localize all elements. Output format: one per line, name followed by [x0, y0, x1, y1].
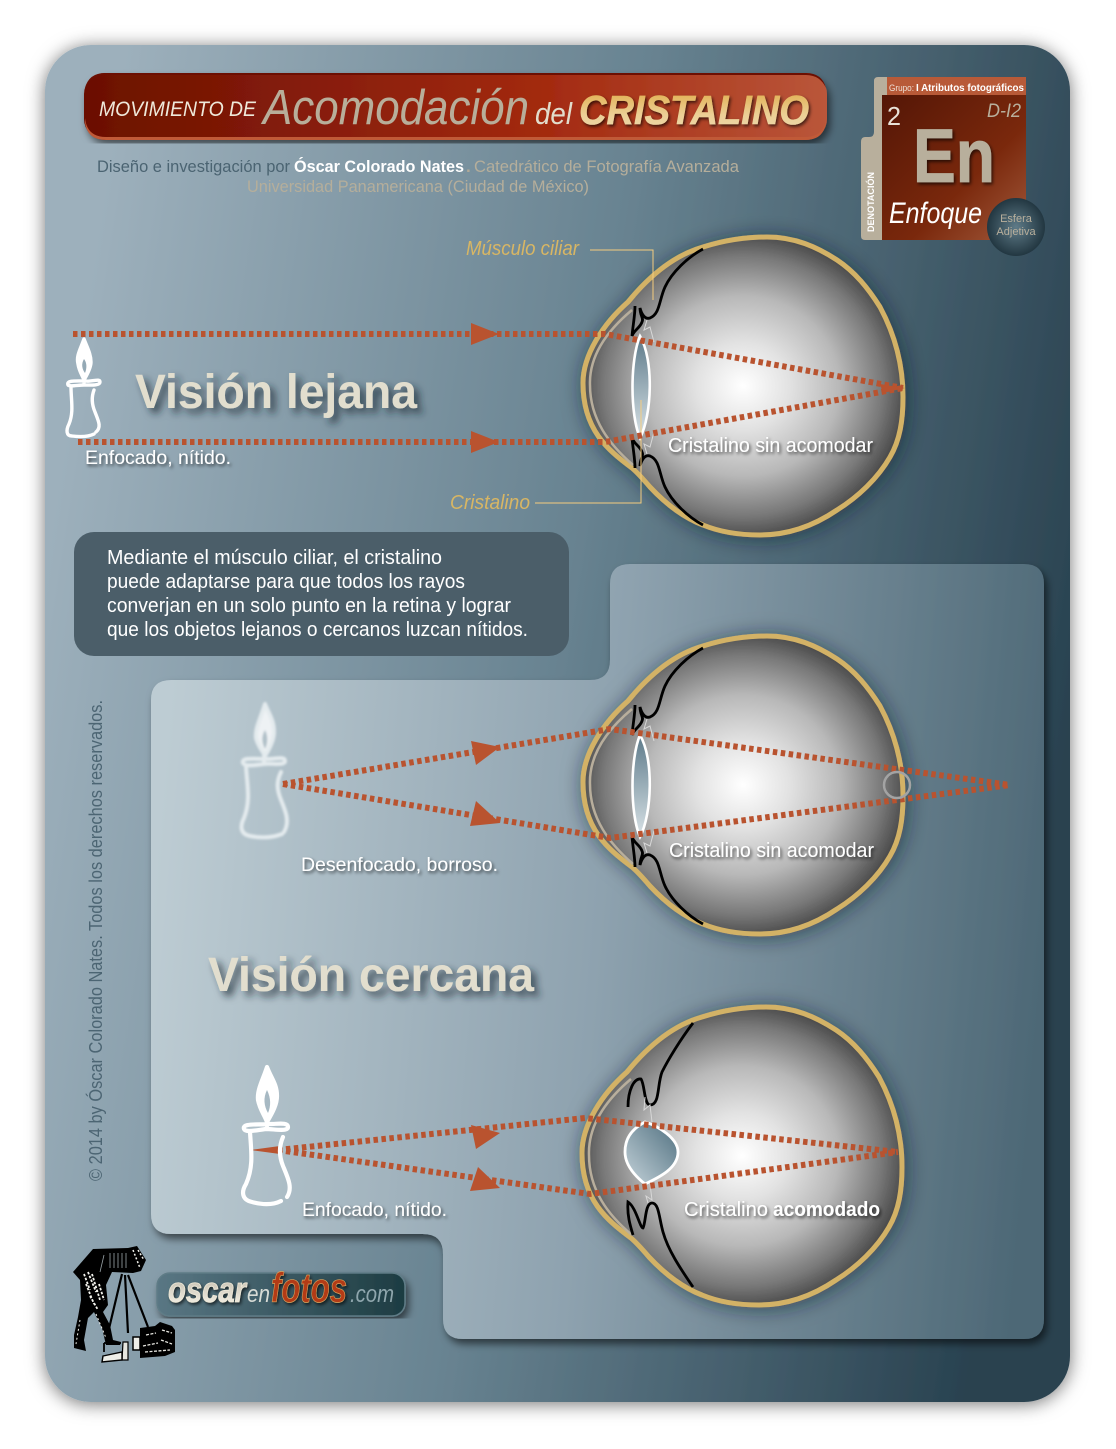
heading: visión lejana: Visión lejana	[135, 366, 417, 419]
title banner	[84, 73, 827, 140]
icon: photographer with camera	[73, 1246, 175, 1362]
copyright: © 2014 by Óscar Colorado Nates. Todos los derechos reservados.	[85, 700, 106, 1181]
title banner: del	[535, 96, 573, 131]
icon: candle, blurred	[242, 704, 287, 837]
panel: near vision	[151, 564, 1044, 1339]
explanation box: converjan en un solo punto en la retina y lograr	[107, 595, 511, 617]
credits: Universidad Panamericana (Ciudad de México)	[247, 177, 589, 196]
caption: cristalino sin acomodar: Cristalino sin acomodar	[669, 840, 874, 862]
rays: near vision focused	[250, 1118, 898, 1194]
element badge: En: I Atributos fotográficos	[916, 82, 1024, 94]
credits	[97, 157, 740, 196]
credits: Diseño e investigación por	[97, 157, 290, 176]
heading: visión cercana: Visión cercana	[208, 949, 534, 1002]
leader: músculo ciliar	[590, 250, 653, 300]
eye: distant vision	[583, 237, 903, 535]
title banner: Acomodación	[260, 81, 529, 135]
element badge: En: Adjetiva	[996, 226, 1036, 238]
credits: Catedrático de Fotografía Avanzada	[474, 157, 740, 176]
explanation box: Mediante el músculo ciliar, el cristalino	[107, 547, 442, 569]
caption: enfocado: Enfocado, nítido.	[302, 1199, 447, 1221]
eye: near vision unaccommodated	[583, 636, 903, 934]
label: cristalino: Cristalino	[450, 492, 530, 514]
logo: oscarenfotos.com	[157, 1264, 405, 1316]
credits: .	[466, 157, 471, 176]
element badge: En: D-I2	[987, 101, 1021, 122]
element badge: En: Enfoque	[889, 197, 982, 230]
explanation box: que los objetos lejanos o cercanos luzcan nítidos.	[107, 619, 528, 641]
element badge: En: Esfera	[1000, 213, 1033, 225]
element badge: En: En	[913, 114, 995, 199]
caption: cristalino acomodado: acomodado	[773, 1199, 880, 1221]
element badge: En: Grupo:	[889, 83, 914, 93]
logo: oscarenfotos.com: oscar	[168, 1269, 248, 1310]
icon: candle, focused	[243, 1067, 290, 1204]
logo: oscarenfotos.com: .com	[350, 1281, 394, 1308]
rays: distant vision	[73, 323, 905, 453]
caption: cristalino sin acomodar: Cristalino sin acomodar	[668, 435, 873, 457]
rays: near vision blurred	[283, 729, 1010, 838]
eye: near vision accommodated	[582, 1007, 902, 1305]
caption: enfocado: Enfocado, nítido.	[85, 447, 231, 469]
element badge: En: DENOTACIÓN	[865, 172, 877, 232]
title banner: CRISTALINO	[579, 87, 809, 133]
credits: Óscar Colorado Nates	[294, 157, 464, 176]
logo: oscarenfotos.com: en	[247, 1281, 270, 1308]
leader: cristalino	[535, 400, 641, 503]
explanation box	[74, 532, 569, 656]
label: músculo ciliar: Músculo ciliar	[466, 238, 580, 260]
explanation box: puede adaptarse para que todos los rayos	[107, 571, 465, 593]
caption: cristalino acomodado	[684, 1199, 880, 1221]
element badge: En: 2	[887, 101, 901, 131]
element badge: En	[861, 77, 1045, 256]
caption: desenfocado: Desenfocado, borroso.	[301, 854, 498, 876]
caption: cristalino acomodado: Cristalino	[684, 1199, 768, 1221]
icon: candle, sharp	[67, 339, 100, 437]
title banner: MOVIMIENTO DE	[99, 98, 257, 121]
logo: oscarenfotos.com: fotos	[271, 1264, 347, 1311]
